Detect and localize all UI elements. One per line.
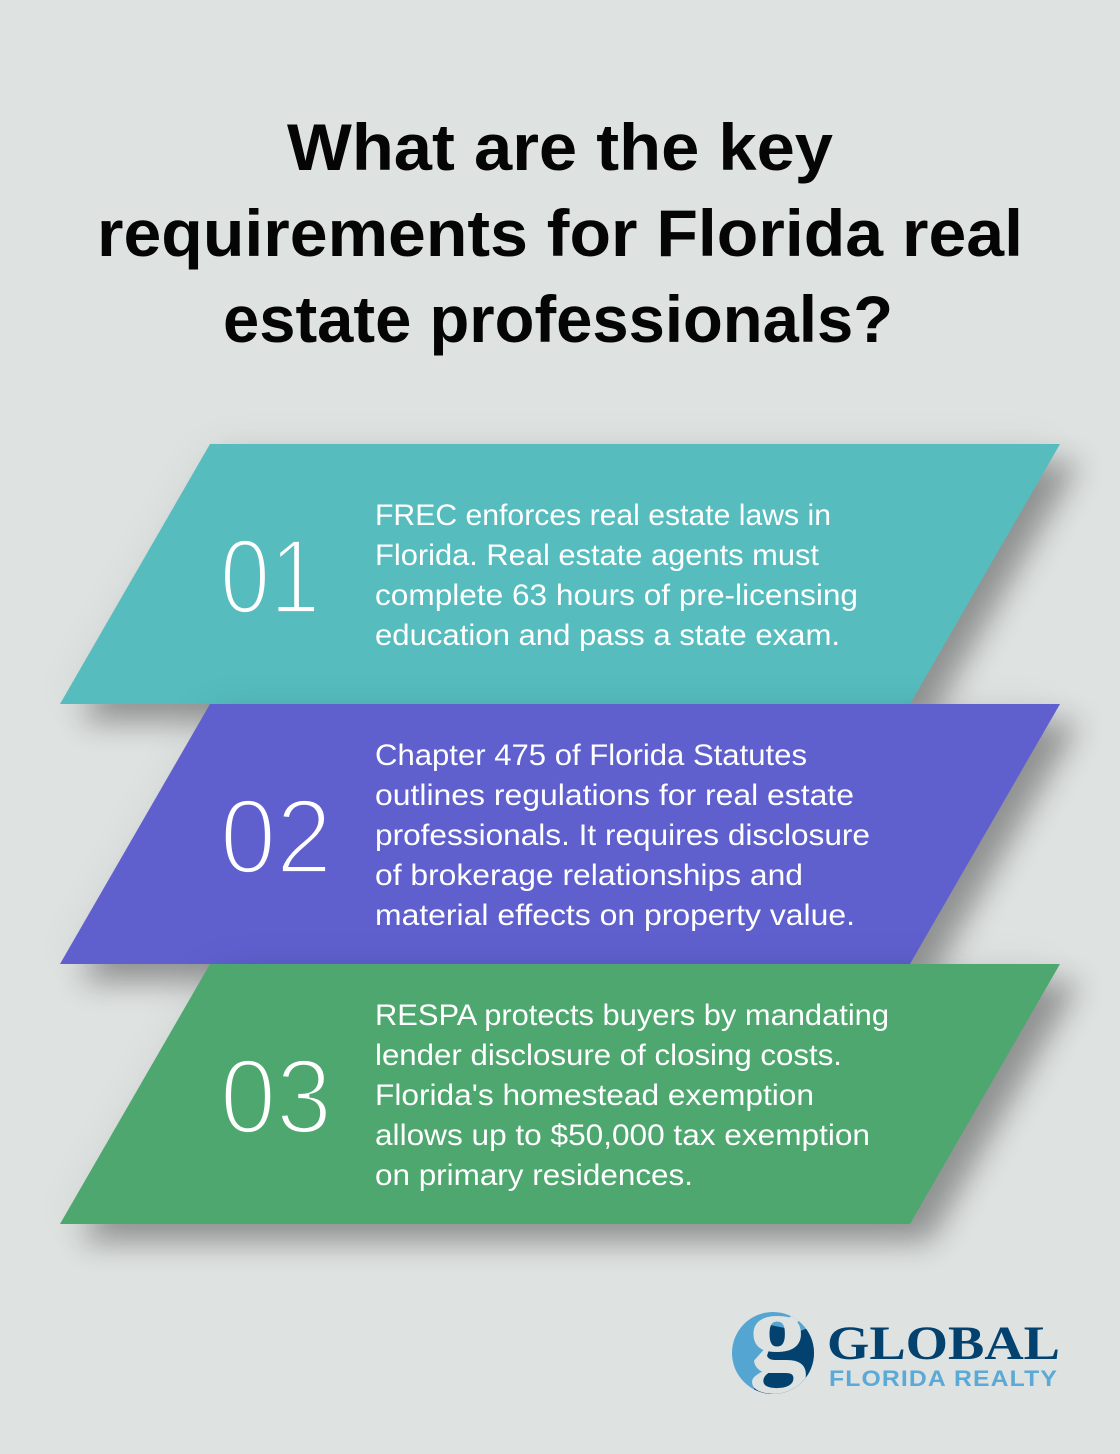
panel: step 03 [60,964,1060,1224]
title: requirements for Florida real [97,196,1023,270]
number 02: 02 [220,778,332,896]
text: step 03 description: Florida's homestead exemption [375,1079,814,1112]
text: step 02 description: Chapter 475 of Florida Statutes [375,739,807,772]
text: step 02 description [375,739,870,932]
text: step 03 description: on primary residences. [375,1159,693,1192]
panel: step 01 [60,444,1060,704]
title: estate professionals? [223,282,893,356]
title [97,110,1023,356]
text: step 03 description: RESPA protects buyers by mandating [375,999,889,1032]
number 01: 01 [220,518,320,636]
text: step 01 description: education and pass a state exam. [375,619,840,652]
text: step 01 description: FREC enforces real estate laws in [375,499,831,532]
text: step 03 description [375,999,889,1192]
wordmark: GLOBAL: GLOBAL [827,1317,1060,1370]
title: What are the key [287,110,833,184]
panel: step 02 [60,704,1060,964]
text: step 01 description [375,499,858,652]
text: step 01 description: Florida. Real estate agents must [375,539,820,572]
purple parallelogram [60,704,1060,964]
green parallelogram [60,964,1060,1224]
text: step 02 description: of brokerage relationships and [375,859,803,892]
text: step 03 description: lender disclosure of closing costs. [375,1039,842,1072]
icon: g in circle [732,1312,814,1394]
text: step 02 description: material effects on property value. [375,899,855,932]
text: step 01 description: complete 63 hours of pre-licensing [375,579,858,612]
teal parallelogram [60,444,1060,704]
text: step 02 description: outlines regulations for real estate [375,779,854,812]
wordmark: FLORIDA REALTY: FLORIDA REALTY [829,1366,1058,1391]
number 03: 03 [220,1038,332,1156]
text: step 03 description: allows up to $50,000 tax exemption [375,1119,870,1152]
logo: Global Florida Realty [732,1312,1058,1394]
text: step 02 description: professionals. It requires disclosure [375,819,870,852]
icon: g in circle: g [749,1270,807,1394]
